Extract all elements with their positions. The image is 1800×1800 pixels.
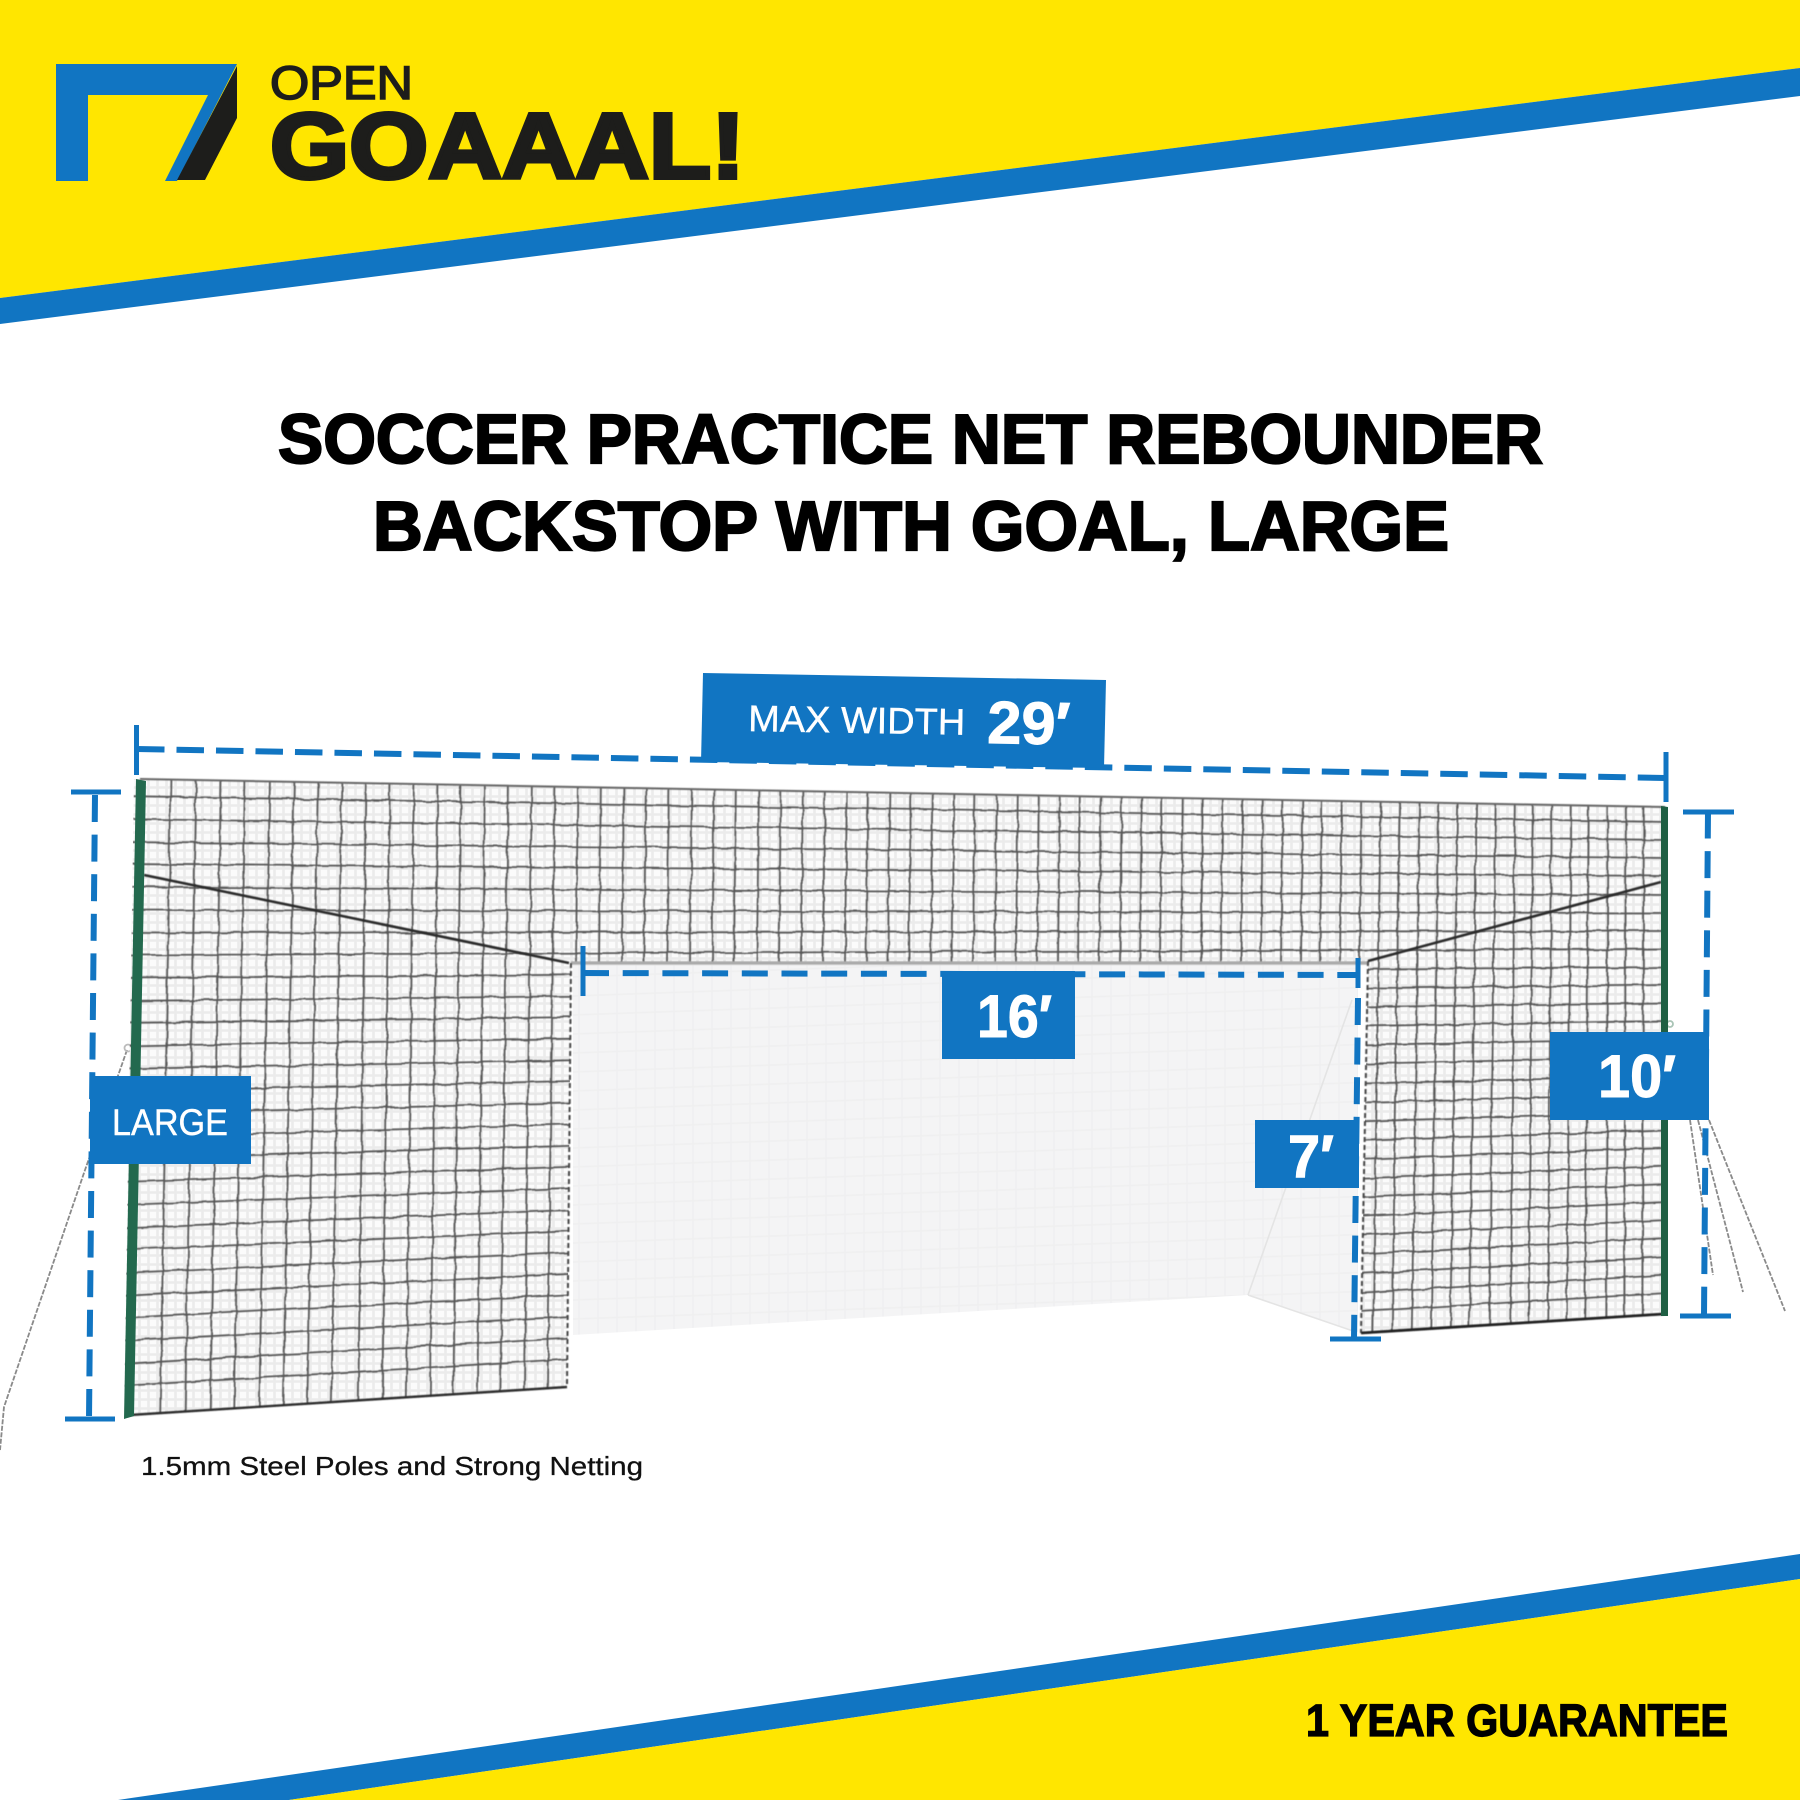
right pole bbox=[1661, 806, 1668, 1316]
dimension: max width line bbox=[136, 725, 1666, 802]
caption: 1.5mm Steel Poles and Strong Netting bbox=[141, 1451, 643, 1481]
dimension: goal width line bbox=[583, 946, 1358, 996]
header blue stripe bbox=[0, 68, 1800, 324]
label: 16 feet bbox=[942, 971, 1075, 1059]
guarantee text: 1 YEAR GUARANTEE bbox=[1306, 1695, 1728, 1746]
logo word: OPEN: OPEN bbox=[270, 56, 413, 109]
dimension: goal height line bbox=[1330, 958, 1381, 1339]
label: 10 feet: 10′ bbox=[1598, 1043, 1676, 1110]
left pole bbox=[124, 779, 146, 1419]
guy ropes bbox=[0, 1021, 1785, 1450]
title: BACKSTOP WITH GOAL, LARGE bbox=[373, 487, 1449, 565]
label: large: LARGE bbox=[112, 1102, 228, 1143]
footer blue stripe bbox=[118, 1554, 1800, 1800]
label: 10 feet bbox=[1550, 1032, 1709, 1120]
title bbox=[278, 400, 1543, 565]
label: 7 feet: 7′ bbox=[1288, 1123, 1334, 1190]
label: max width bbox=[701, 673, 1106, 768]
label: 16 feet: 16′ bbox=[977, 983, 1052, 1050]
icon: goal mark bbox=[56, 64, 237, 181]
footer yellow band bbox=[289, 1579, 1800, 1800]
logo word: GOAAAL!: GOAAAL! bbox=[270, 94, 745, 198]
title: SOCCER PRACTICE NET REBOUNDER bbox=[278, 400, 1543, 478]
rebounder netting bbox=[120, 774, 1670, 1425]
label: 7 feet bbox=[1255, 1120, 1359, 1190]
label: max width: 29′ bbox=[987, 689, 1071, 757]
net edges and tension cords bbox=[130, 779, 1665, 1415]
header yellow band bbox=[0, 0, 1800, 298]
dimension: left height line bbox=[65, 792, 121, 1419]
label: max width: MAX WIDTH bbox=[748, 698, 966, 743]
dimension: right height line bbox=[1680, 812, 1734, 1316]
logo bbox=[56, 56, 745, 198]
label: large bbox=[90, 1076, 251, 1164]
goal net bbox=[573, 965, 1358, 1335]
